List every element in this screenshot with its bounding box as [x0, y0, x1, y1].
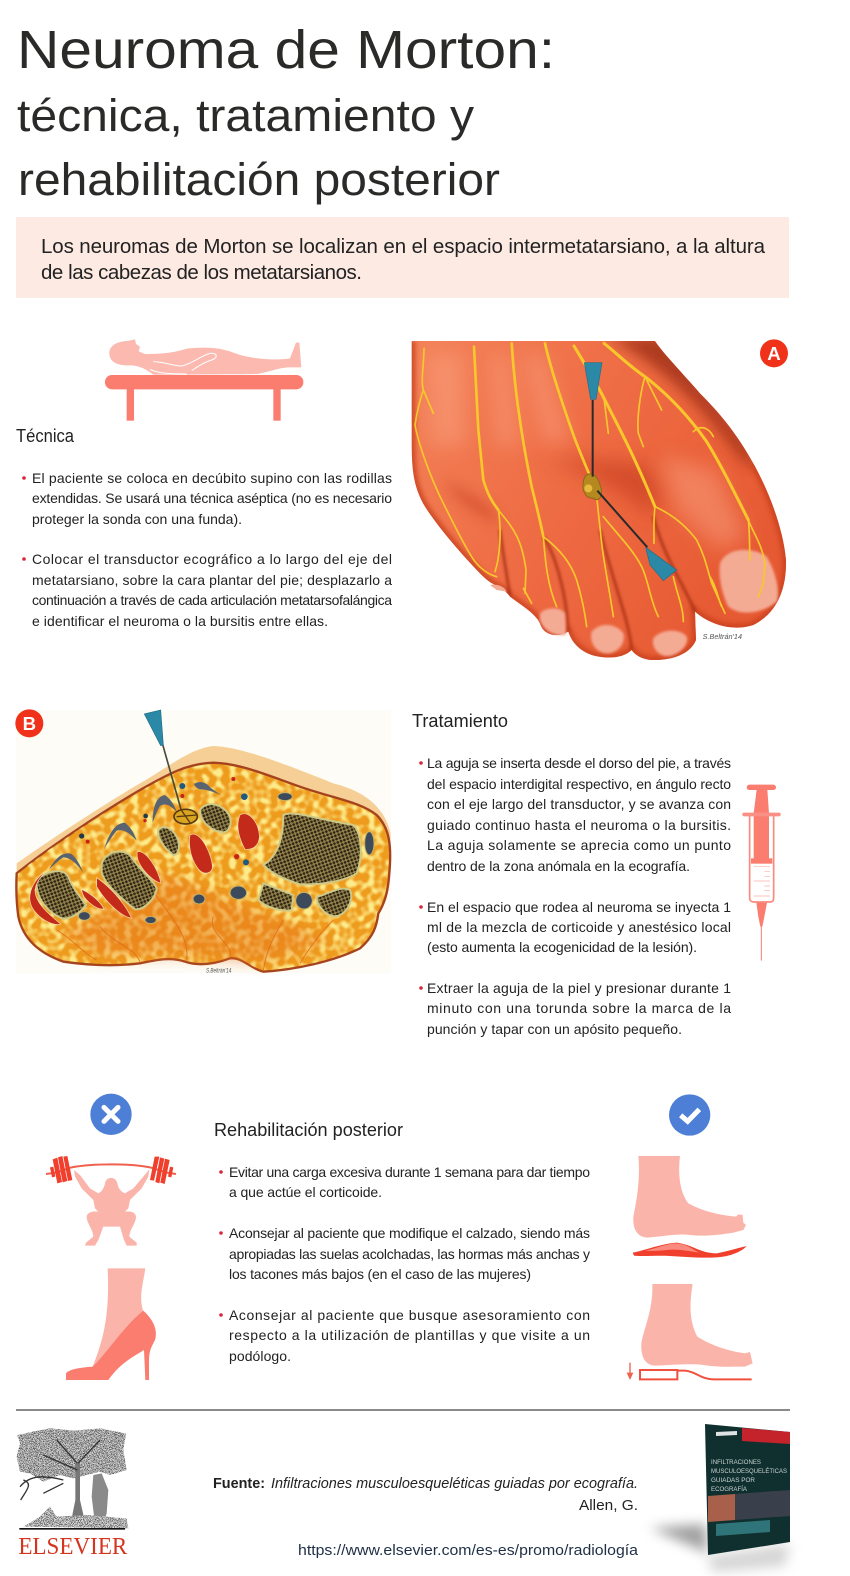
toenails	[490, 550, 778, 656]
heading: Técnica: Técnica	[16, 426, 75, 446]
fat tissue	[16, 763, 390, 972]
book cover: MUSCULOESQUELÉTICAS	[711, 1466, 788, 1475]
neuroma and needle	[144, 710, 197, 824]
icon: foot over heel lift	[627, 1284, 753, 1380]
text block: tratamiento: del espacio interdigital respectivo, en ángulo recto	[427, 776, 731, 792]
small vessels	[79, 777, 249, 865]
text block: técnica: Colocar el transductor ecográfico a lo largo del eje del	[32, 551, 392, 567]
logo: Elsevier	[17, 1428, 128, 1560]
title: técnica, tratamiento y	[17, 90, 475, 141]
text block: tratamiento: punción y tapar con un apósito pequeño.	[427, 1021, 682, 1037]
text block: tratamiento: con el eje largo del transductor, y se avanza con	[427, 796, 731, 812]
signature: S.Beltrán'14	[703, 632, 742, 641]
icon: syringe	[742, 785, 781, 961]
url: https://www.elsevier.com/es-es/promo/radiología	[298, 1542, 639, 1559]
tendons	[49, 782, 221, 873]
source citation	[213, 1476, 638, 1514]
text block: técnica: proteger la sonda con una funda).	[32, 511, 242, 527]
text block: técnica: metatarsiano, sobre la cara plantar del pie; desplazarlo a	[32, 572, 392, 588]
text block: rehabilitación: apropiadas las suelas acolchadas, las hormas más anchas y	[229, 1246, 590, 1262]
vessels	[78, 793, 374, 924]
needle	[593, 400, 647, 547]
book cover	[650, 1424, 790, 1572]
text block: tratamiento: guiado continuo hasta el neuroma o la bursitis.	[427, 817, 731, 833]
text block: tratamiento: (esto aumenta la ecogenicidad de la lesión).	[427, 939, 697, 955]
title	[17, 20, 555, 205]
text block: rehabilitación: podólogo.	[229, 1348, 291, 1364]
book cover: ECOGRAFÍA	[711, 1484, 748, 1493]
badge A: A	[767, 343, 781, 364]
text block: tratamiento: Extraer la aguja de la piel y presionar durante 1	[427, 980, 731, 996]
source citation: Fuente:	[213, 1476, 265, 1492]
text block: técnica: continuación a través de cada articulación metatarsofalángica	[32, 592, 392, 608]
intro banner	[16, 217, 789, 298]
badge A	[760, 339, 788, 367]
text block: tratamiento: La aguja se inserta desde el dorso del pie, a través	[427, 755, 731, 771]
text block: rehabilitación: Aconsejar al paciente que busque asesoramiento con	[229, 1307, 590, 1323]
title: Neuroma de Morton:	[17, 20, 555, 80]
muscles	[30, 814, 259, 924]
neuroma	[583, 474, 602, 500]
text block: tratamiento: dentro de la zona anómala en la ecografía.	[427, 858, 690, 874]
text block: rehabilitación: Aconsejar al paciente que modifique el calzado, siendo más	[229, 1225, 590, 1241]
title: rehabilitación posterior	[18, 154, 500, 205]
book cover: INFILTRACIONES	[711, 1459, 762, 1466]
wordmark: ELSEVIER	[18, 1534, 127, 1560]
text block: tratamiento: La aguja solamente se aprecia como un punto	[427, 837, 731, 853]
icon: patient lying on table	[105, 339, 303, 421]
icon: foot over insole	[633, 1156, 747, 1258]
illustration A: foot with needle	[412, 337, 788, 660]
badge B: B	[23, 713, 36, 734]
heading: Tratamiento: Tratamiento	[412, 711, 508, 731]
bones	[37, 804, 361, 919]
icon: correct (blue check)	[669, 1094, 710, 1136]
shading on foot	[412, 337, 786, 660]
text block: rehabilitación: los tacones más bajos (en el caso de las mujeres)	[229, 1266, 531, 1282]
text block: técnica	[22, 470, 392, 629]
text block: rehabilitación	[219, 1164, 590, 1364]
text block: tratamiento: En el espacio que rodea al neuroma se inyecta 1	[427, 899, 731, 915]
icon: high heel	[66, 1268, 156, 1380]
icon: wrong (blue x)	[90, 1094, 132, 1135]
text block: tratamiento: minuto con una torunda sobre la marca de la	[427, 1000, 731, 1016]
heading: Rehabilitación posterior: Rehabilitación posterior	[214, 1120, 403, 1140]
text block: tratamiento	[419, 755, 731, 1037]
signature: S.Beltrán'14	[206, 968, 232, 975]
tree engraving	[17, 1428, 128, 1530]
text block: rehabilitación: a que actúe el corticoide.	[229, 1184, 382, 1200]
book cover: GUIADAS POR	[711, 1477, 755, 1484]
skin layer	[17, 746, 391, 887]
text block: rehabilitación: respecto a la utilización de plantillas y que visite a un	[229, 1327, 590, 1343]
badge B	[15, 709, 43, 737]
source citation: Allen, G.	[579, 1498, 638, 1514]
nerves	[415, 343, 765, 627]
text block: rehabilitación: Evitar una carga excesiva durante 1 semana para dar tiempo	[229, 1164, 590, 1180]
intro banner: Los neuromas de Morton se localizan en el espacio intermetatarsiano, a la altura	[41, 235, 766, 258]
text block: técnica: e identificar el neuroma o la bursitis entre ellas.	[32, 613, 328, 629]
source citation: Infiltraciones musculoesqueléticas guiadas por ecografía.	[271, 1476, 638, 1492]
text block: técnica: El paciente se coloca en decúbito supino con las rodillas	[32, 470, 392, 486]
illustration B: foot cross-section	[15, 709, 391, 975]
text block: tratamiento: ml de la mezcla de corticoide y anestésico local	[427, 919, 731, 935]
divider line	[16, 1409, 790, 1411]
text block: técnica: extendidas. Se usará una técnica aséptica (no es necesario	[32, 490, 392, 506]
intro banner: de las cabezas de los metatarsianos.	[41, 261, 362, 284]
icon: weightlifter	[46, 1156, 176, 1246]
